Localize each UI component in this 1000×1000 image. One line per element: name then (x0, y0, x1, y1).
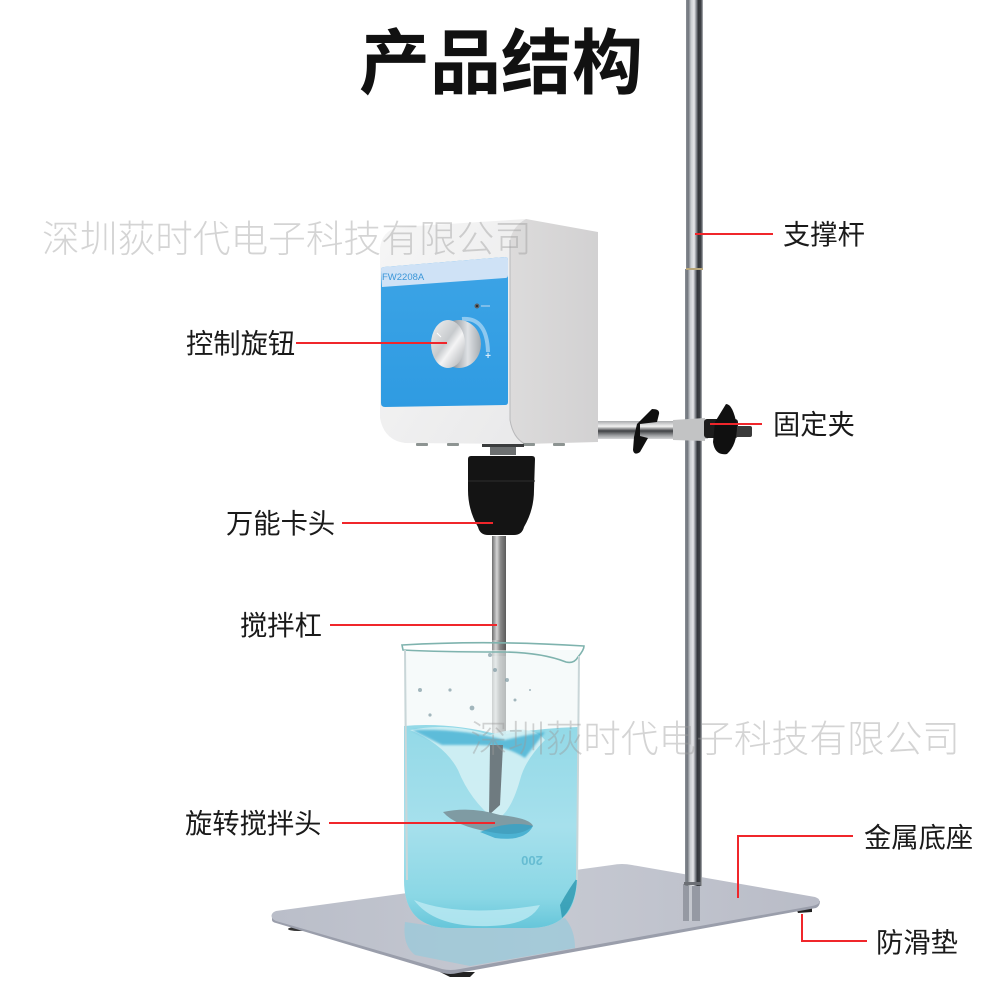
motor shaft collar (482, 444, 524, 455)
beaker reflection (404, 918, 575, 966)
metal base plate (272, 864, 820, 977)
blue control panel (381, 257, 508, 407)
vortex (410, 727, 545, 820)
callout: anti-slip pad: 防滑垫 (876, 927, 958, 958)
droplets (418, 653, 531, 717)
title: 产品结构 (359, 25, 643, 104)
rotating paddle (443, 810, 533, 834)
beaker rim (402, 643, 584, 662)
glass body (404, 650, 580, 928)
capacity mark: 200 (521, 853, 543, 868)
clamp (598, 404, 752, 454)
thumb screw right (713, 404, 737, 454)
callout: metal base (738, 822, 973, 898)
post reflection (683, 884, 700, 921)
universal chuck (468, 456, 535, 535)
callout: metal base: 金属底座 (864, 822, 973, 853)
support rod (684, 0, 703, 886)
water (404, 725, 578, 928)
callout: rotating paddle: 旋转搅拌头 (185, 808, 321, 839)
side panel (510, 219, 598, 444)
beaker with blue water (402, 643, 584, 928)
model label strip (381, 257, 508, 287)
stirrer housing (380, 219, 598, 446)
plus sign: + (485, 351, 491, 362)
stirring rod (490, 536, 506, 800)
watermark top: 深圳荻时代电子科技有限公司 (42, 218, 532, 260)
model text: FW2208A (382, 272, 425, 283)
power indicator (474, 304, 490, 308)
control knob (431, 320, 481, 368)
glass bottom highlight (414, 900, 540, 926)
feet screws (416, 443, 565, 446)
front panel (380, 219, 526, 444)
watermark bottom: 深圳荻时代电子科技有限公司 (470, 718, 960, 760)
callout: control knob: 控制旋钮 (186, 328, 295, 359)
callout: anti-slip pad (802, 914, 958, 958)
thumb screw left (633, 409, 659, 454)
callout: fixing clamp: 固定夹 (773, 409, 855, 440)
callout: universal chuck: 万能卡头 (226, 508, 335, 539)
stirring shaft in water (489, 745, 503, 815)
callout: support rod: 支撑杆 (783, 219, 865, 250)
speed scale arc (462, 319, 488, 352)
callout: stirring rod: 搅拌杠 (240, 610, 322, 641)
